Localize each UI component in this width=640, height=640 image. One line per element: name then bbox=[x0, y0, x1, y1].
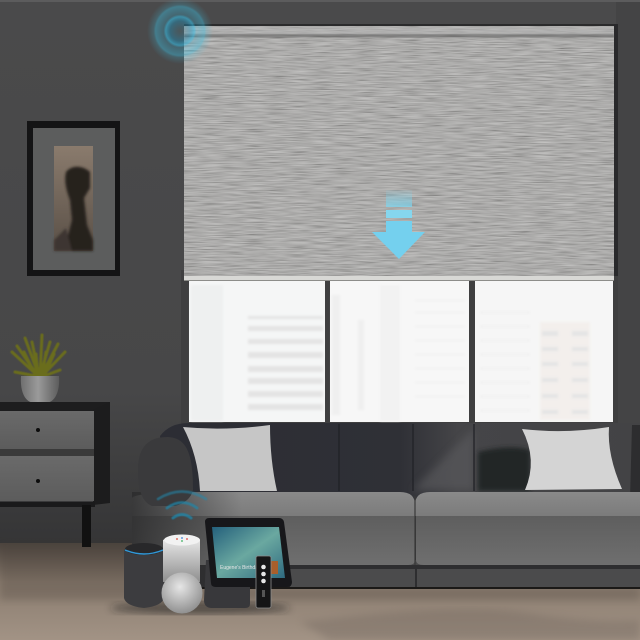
light band bbox=[413, 428, 474, 490]
sofa bbox=[132, 423, 640, 589]
icon: signal pulse bbox=[147, 0, 213, 64]
remote control bbox=[256, 556, 271, 608]
icon: wifi waves bbox=[158, 492, 206, 518]
smart screen bbox=[204, 518, 292, 608]
speaker: dark cylinder bbox=[124, 543, 164, 608]
seat cushions bbox=[132, 492, 415, 516]
blurred city buildings bbox=[191, 285, 590, 421]
speaker: white home bbox=[163, 534, 200, 582]
sideboard leg bbox=[82, 505, 91, 547]
smart devices bbox=[110, 492, 292, 614]
arrow: blind moving down bbox=[372, 190, 425, 259]
roller blind bbox=[184, 24, 618, 281]
pillow shadow bbox=[478, 447, 530, 491]
sideboard bbox=[0, 402, 110, 547]
window bbox=[181, 270, 618, 425]
speaker: mini sphere bbox=[162, 572, 202, 614]
right arm bbox=[630, 425, 640, 500]
right pillow bbox=[522, 427, 622, 490]
base bbox=[132, 516, 192, 566]
framed picture bbox=[27, 121, 120, 276]
sofa back bbox=[160, 423, 640, 500]
screen text: Eugene's Birthday bbox=[220, 565, 261, 571]
left arm bbox=[138, 437, 193, 506]
potted plant bbox=[12, 335, 65, 403]
bottom bar bbox=[184, 276, 614, 281]
headrail bbox=[184, 27, 614, 35]
left pillow bbox=[183, 425, 277, 491]
floor bbox=[0, 543, 640, 640]
